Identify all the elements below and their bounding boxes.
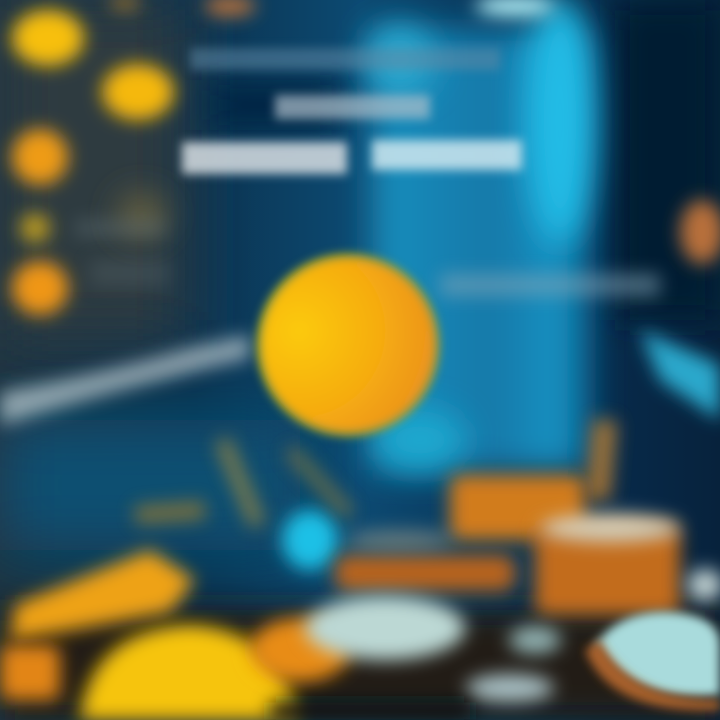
glowing cyan column [282, 0, 594, 570]
left text placeholders [75, 220, 170, 286]
large yellow coin [80, 618, 350, 720]
white wave band [0, 335, 250, 425]
gold bars left [0, 550, 195, 700]
dark floor [0, 610, 720, 720]
blurred heading block [182, 48, 522, 174]
left list of yellow markers [12, 0, 256, 315]
gold stems [135, 420, 605, 525]
faint right label [440, 274, 660, 296]
pale discs [270, 569, 720, 720]
stacks of coins [335, 475, 680, 615]
central yellow sphere [256, 253, 440, 437]
right cyan streak [640, 200, 720, 420]
